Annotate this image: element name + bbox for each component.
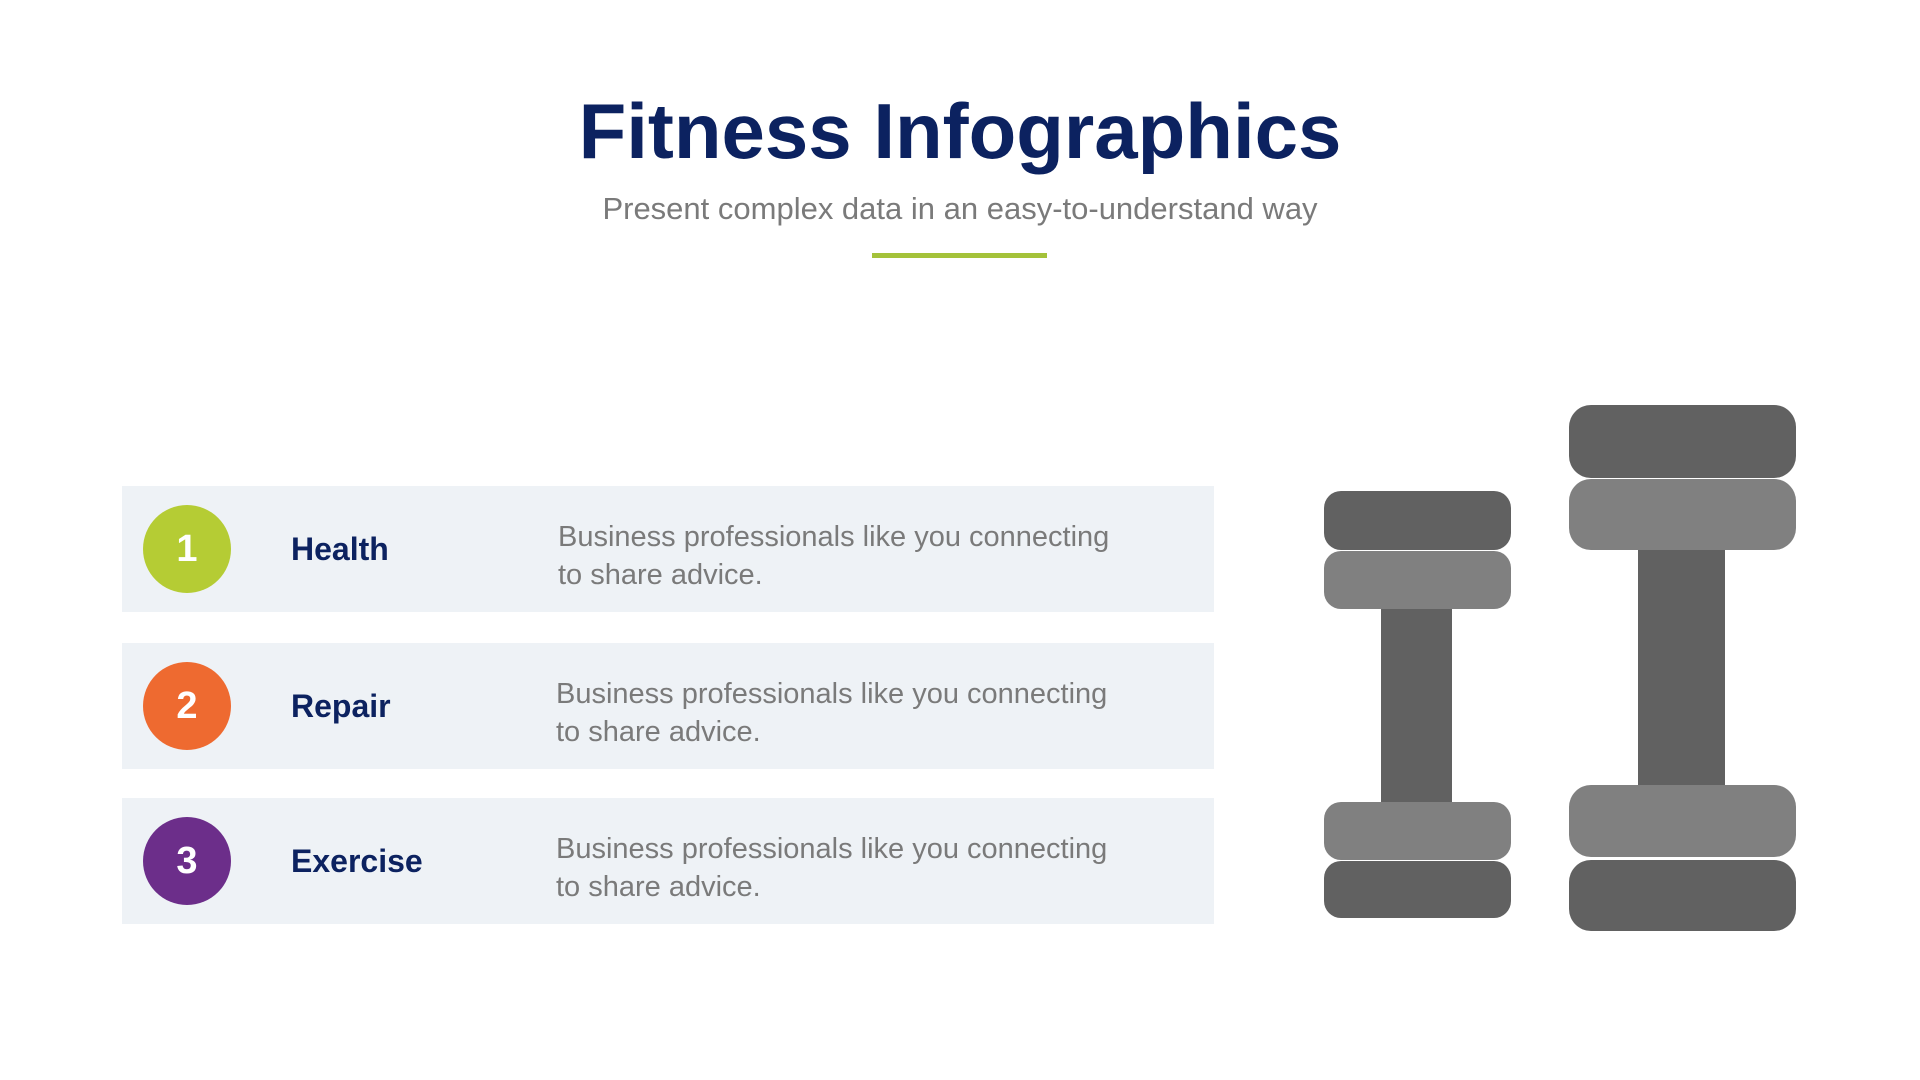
- description 3: Business professionals like you connecting: [556, 833, 1107, 865]
- description 2: to share advice.: [556, 716, 761, 748]
- description 3: [556, 833, 1107, 903]
- badge 2: 2: [176, 685, 198, 727]
- row: repair: [122, 643, 1214, 769]
- description 1: [558, 521, 1109, 591]
- label health: Health: [291, 531, 389, 567]
- badge 3: 3: [176, 840, 198, 882]
- badge 3: [143, 817, 231, 905]
- row: health: [122, 486, 1214, 612]
- title: Fitness Infographics: [579, 87, 1341, 175]
- badge 1: [143, 505, 231, 593]
- label exercise: Exercise: [291, 843, 423, 879]
- description 2: [556, 678, 1107, 748]
- description 2: Business professionals like you connecting: [556, 678, 1107, 710]
- description 1: to share advice.: [558, 559, 763, 591]
- row: exercise: [122, 798, 1214, 924]
- accent line: [872, 253, 1047, 258]
- badge 2: [143, 662, 231, 750]
- description 3: to share advice.: [556, 871, 761, 903]
- badge 1: 1: [176, 528, 198, 570]
- label repair: Repair: [291, 688, 391, 724]
- subtitle: Present complex data in an easy-to-understand way: [602, 191, 1318, 226]
- description 1: Business professionals like you connecting: [558, 521, 1109, 553]
- small dumbbell: [1324, 491, 1511, 918]
- large dumbbell: [1569, 405, 1796, 931]
